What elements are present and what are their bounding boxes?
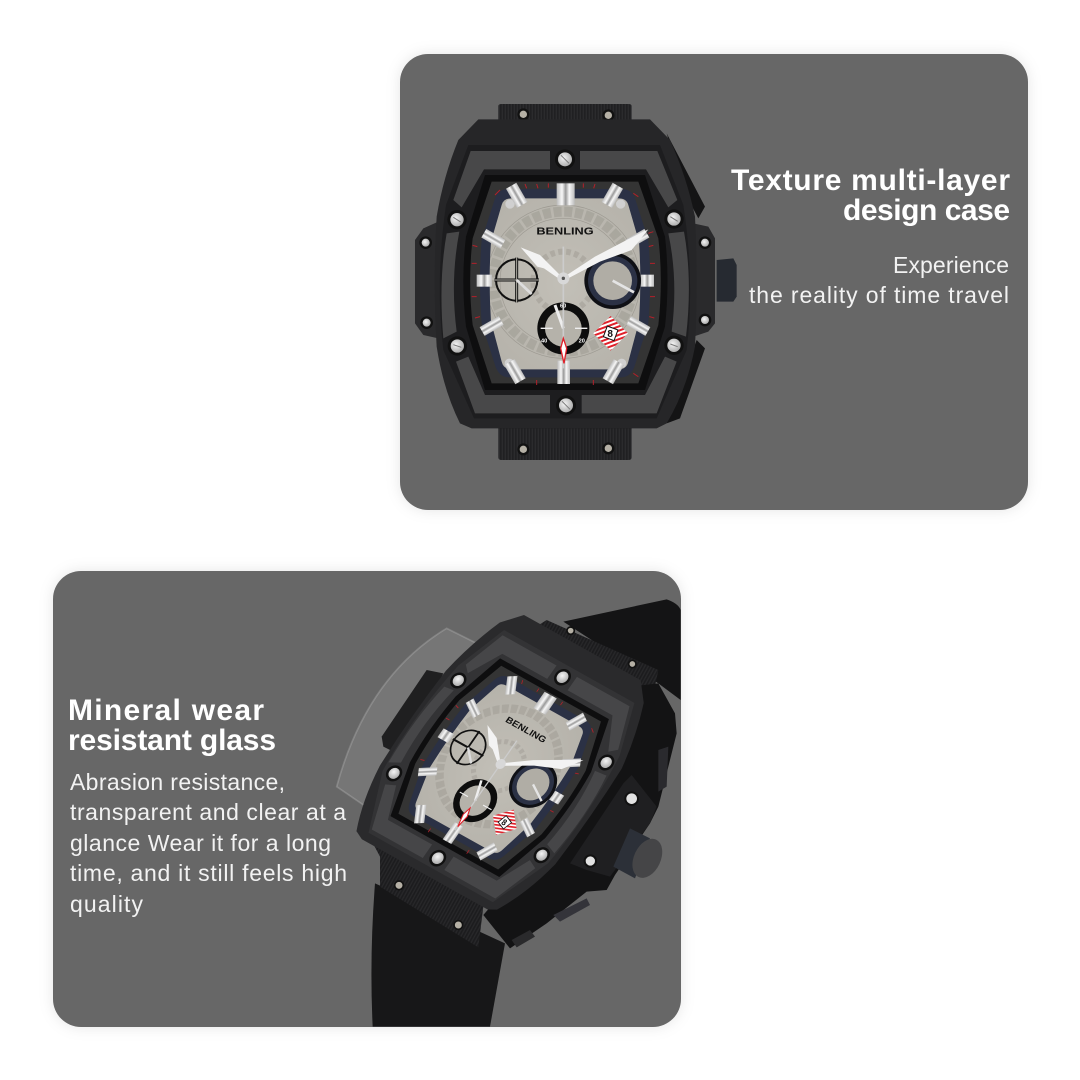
case side [483, 683, 677, 948]
dial: 60 [560, 303, 566, 309]
heading: texture multi-layer: Texture multi-layer [731, 164, 1010, 197]
glass sheet [337, 628, 503, 808]
front face: 8 [499, 817, 510, 828]
straps [498, 104, 632, 460]
body: abrasion resistance: transparent and clear at a [70, 799, 346, 825]
heading: texture multi-layer: design case [843, 194, 1010, 227]
dial: 20 [579, 338, 585, 344]
front face [356, 615, 644, 910]
crown and side guards [717, 258, 737, 302]
panel: texture multi-layer case [400, 54, 1028, 510]
dial: 8 [607, 329, 613, 340]
body: experience: the reality of time travel [749, 282, 1009, 308]
heading: mineral glass: resistant glass [68, 724, 276, 757]
dial [463, 175, 667, 390]
hour markers [477, 183, 654, 384]
body: abrasion resistance: glance Wear it for a long [70, 830, 331, 856]
body: abrasion resistance [70, 769, 347, 917]
heading: mineral glass: Mineral wear [68, 694, 264, 727]
left subdial [494, 258, 539, 302]
body: abrasion resistance: Abrasion resistance, [70, 769, 285, 795]
crown [613, 828, 668, 883]
heading: texture multi-layer [731, 164, 1010, 227]
body: abrasion resistance: quality [70, 891, 144, 917]
bottom subdial [537, 302, 589, 354]
watch: angled view with glass [337, 598, 681, 1027]
body: experience: Experience [893, 252, 1009, 278]
brand: BENLING [536, 226, 594, 237]
left guard [382, 670, 443, 757]
straps [563, 599, 681, 700]
date window [593, 316, 628, 351]
hands [521, 247, 563, 280]
heading: mineral glass [68, 694, 276, 757]
bezel screws [447, 149, 684, 415]
lower lug [369, 837, 483, 947]
watch: front view [415, 104, 737, 460]
body: abrasion resistance: time, and it still feels high [70, 860, 347, 886]
body: experience [749, 252, 1009, 308]
case and bezel [435, 119, 697, 428]
dial: 40 [541, 338, 547, 344]
right subdial [584, 252, 641, 309]
upper lug [533, 620, 658, 687]
front face: BENLING [504, 714, 549, 745]
panel: mineral glass [53, 571, 681, 1027]
